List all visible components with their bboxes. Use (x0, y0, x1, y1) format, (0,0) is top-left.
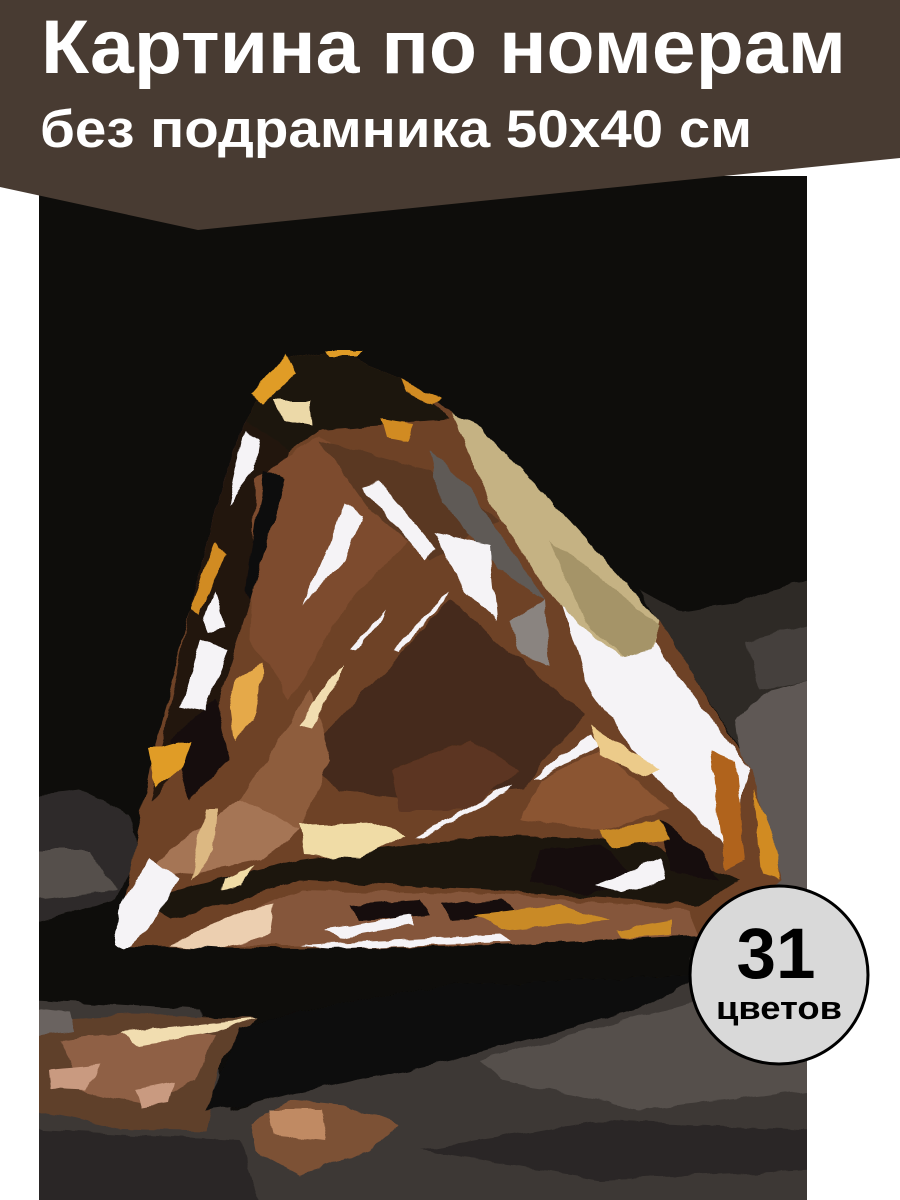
dark left edge (150, 420, 290, 800)
orange accents (148, 740, 190, 785)
mid brown facets (250, 436, 408, 700)
gem cast shadow (205, 975, 700, 1110)
dark crown (246, 354, 450, 453)
subtitle: без подрамника 50х40 см (40, 100, 752, 159)
badge: 31 colours: цветов (716, 990, 842, 1026)
smoke background left (34, 790, 138, 922)
header banner (0, 0, 900, 230)
badge: 31 colours: 31 (737, 915, 815, 994)
smoke floor bottom (34, 975, 812, 1200)
title: Картина по номерам (41, 5, 846, 90)
grey facets (430, 450, 545, 600)
cream shards (300, 822, 405, 858)
white shards (433, 532, 497, 620)
mottled dark patches (530, 845, 640, 895)
gem body (115, 350, 782, 950)
painting: gemstone on dark background (34, 176, 812, 1200)
tan highlight (452, 415, 660, 657)
badge: 31 colours (690, 886, 868, 1064)
smoke background right (640, 580, 807, 960)
dark lower band (135, 835, 740, 920)
white facet right (560, 600, 750, 848)
reflection lower left (34, 1008, 400, 1175)
